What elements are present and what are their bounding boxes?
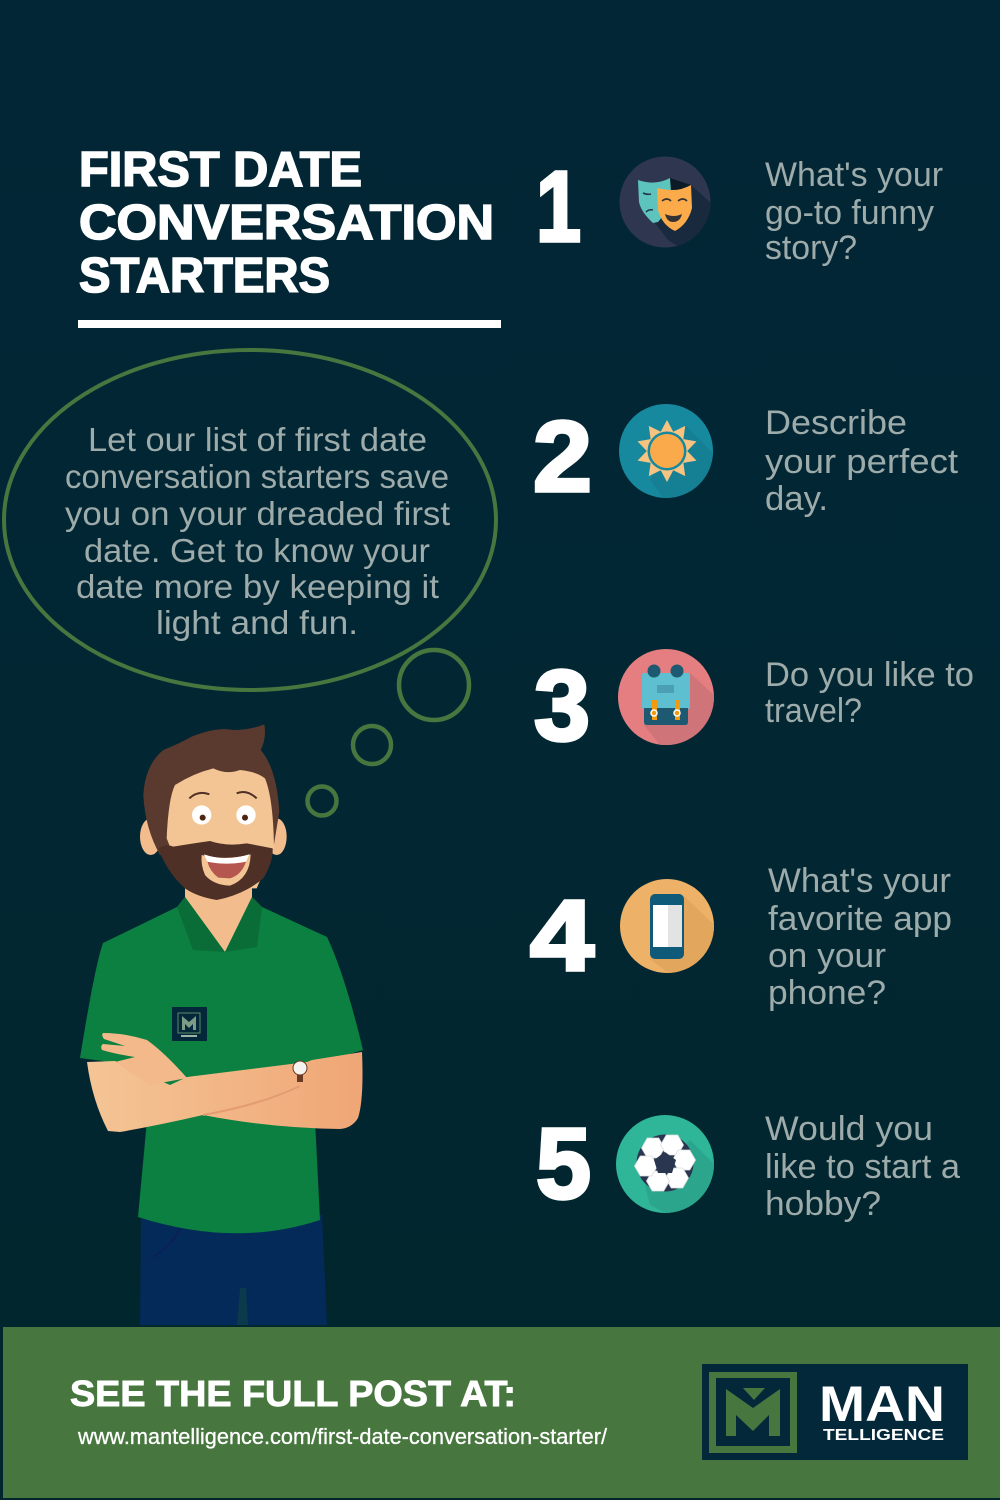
question 1 xyxy=(765,156,943,267)
question 4: on your xyxy=(768,937,886,975)
shirt collar xyxy=(177,897,262,952)
thought bubble xyxy=(4,350,496,816)
watch xyxy=(293,1061,307,1082)
question 5: hobby? xyxy=(765,1185,881,1223)
question 4: favorite app xyxy=(768,900,952,938)
trousers xyxy=(140,1215,327,1325)
item 3 xyxy=(534,649,972,745)
question 3: Do you like to xyxy=(765,656,974,694)
number 3: 3 xyxy=(534,650,590,762)
question 2: Describe xyxy=(765,404,907,442)
item 2 xyxy=(533,401,959,520)
bubble outline xyxy=(4,350,496,690)
question 4: What's your xyxy=(768,862,951,900)
question 3 xyxy=(765,656,974,730)
bubble intro text: Let our list of first date xyxy=(88,421,427,458)
number 5: 5 xyxy=(536,1108,591,1220)
bubble intro text: conversation starters save xyxy=(65,458,449,495)
question 2: your perfect xyxy=(765,443,959,481)
title: CONVERSATION xyxy=(79,196,494,250)
man illustration xyxy=(80,724,363,1325)
neck xyxy=(185,880,252,952)
title: STARTERS xyxy=(79,249,330,303)
hand xyxy=(101,1033,187,1085)
footer url: www.mantelligence.com/first-date-conversation-starter/ xyxy=(77,1424,608,1449)
green shirt xyxy=(80,897,363,1233)
logo: MAN xyxy=(819,1376,945,1432)
title xyxy=(79,143,494,303)
footer heading: SEE THE FULL POST AT: xyxy=(70,1373,516,1414)
title: FIRST DATE xyxy=(79,143,362,197)
footer band xyxy=(3,1327,1000,1498)
bubble intro text: date. Get to know your xyxy=(84,532,430,569)
question 1: go-to funny xyxy=(765,194,934,232)
question 5 xyxy=(765,1110,960,1223)
question 2 xyxy=(765,404,959,518)
item 4 xyxy=(530,862,952,1012)
logo xyxy=(702,1364,968,1460)
bubble intro text: light and fun. xyxy=(156,604,358,641)
bubble intro text xyxy=(65,421,450,641)
item 5 xyxy=(536,1108,960,1225)
question 5: like to start a xyxy=(765,1148,960,1186)
head xyxy=(140,724,287,900)
eyes xyxy=(192,805,211,825)
face xyxy=(167,768,274,888)
bubble intro text: you on your dreaded first xyxy=(65,495,450,532)
bubble intro text: date more by keeping it xyxy=(76,568,439,605)
beard xyxy=(158,841,273,900)
item 1 xyxy=(536,151,943,267)
icon: theatre masks xyxy=(620,156,710,248)
thought circles xyxy=(308,650,469,816)
question 1: story? xyxy=(765,229,857,267)
question 5: Would you xyxy=(765,1110,933,1148)
eyebrows xyxy=(189,792,257,798)
ears xyxy=(140,818,161,855)
title underline xyxy=(78,320,501,328)
icon: backpack xyxy=(618,649,714,745)
shirt badge xyxy=(172,1007,207,1041)
question 3: travel? xyxy=(765,692,862,730)
question 2: day. xyxy=(765,480,828,518)
hair xyxy=(143,724,279,855)
icon: smartphone xyxy=(620,879,714,973)
question 1: What's your xyxy=(765,156,943,194)
number 2: 2 xyxy=(533,401,592,513)
icon: soccer ball xyxy=(616,1115,714,1213)
question 4: phone? xyxy=(768,974,886,1012)
number 4: 4 xyxy=(530,880,594,992)
logo: TELLIGENCE xyxy=(823,1427,944,1444)
icon: sun xyxy=(619,404,713,498)
crossed arms xyxy=(87,1033,362,1132)
number 1: 1 xyxy=(536,151,581,263)
question 4 xyxy=(768,862,952,1012)
mouth xyxy=(201,854,251,886)
